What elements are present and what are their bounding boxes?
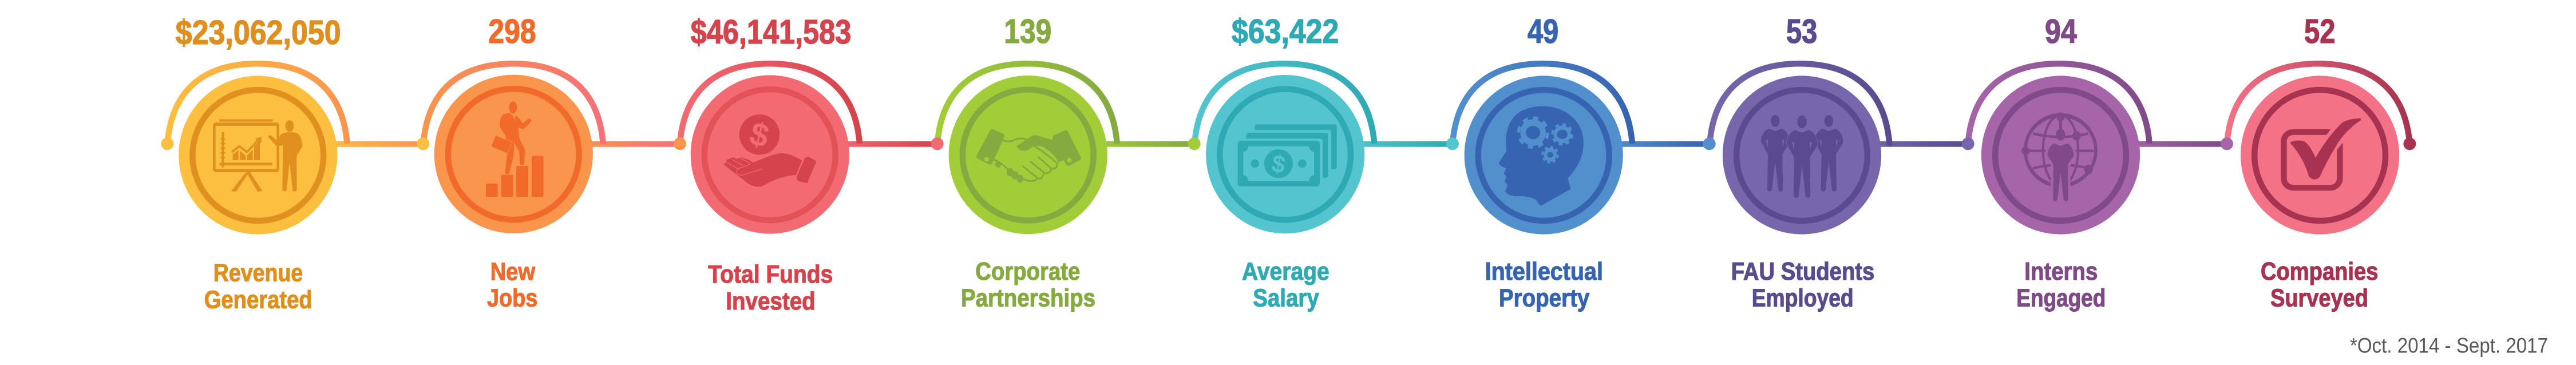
connector line <box>2118 141 2227 147</box>
start dot <box>1446 137 1459 150</box>
medallion <box>1981 76 2140 235</box>
start dot <box>2221 137 2233 150</box>
connector line <box>1345 141 1453 147</box>
start dot <box>161 137 174 150</box>
medallion <box>1723 76 1881 235</box>
panel: Corporate Partnerships <box>931 12 1194 312</box>
icon: presenter at chart board <box>214 120 303 192</box>
label: Intellectual <box>1485 257 1603 285</box>
arc <box>1968 64 2150 144</box>
arc <box>680 64 860 144</box>
value: 139 <box>1004 12 1051 50</box>
panel: Interns Engaged <box>1962 12 2227 312</box>
medallion <box>434 75 593 233</box>
value: 298 <box>488 12 536 50</box>
value: 53 <box>1786 12 1817 50</box>
label <box>487 257 537 312</box>
panel: Total Funds Invested <box>674 13 937 315</box>
label: Engaged <box>2016 284 2106 312</box>
value: $46,141,583 <box>691 13 851 51</box>
icon: hand holding coin: $ <box>746 115 773 155</box>
icon: head with gears <box>1499 106 1584 205</box>
label: FAU Students <box>1731 257 1874 285</box>
label <box>1242 257 1329 312</box>
panel: New Jobs <box>417 12 680 312</box>
start dot <box>1703 137 1716 150</box>
value: 94 <box>2045 12 2077 50</box>
value: 52 <box>2304 12 2335 50</box>
label: Employed <box>1752 284 1854 312</box>
value: $63,422 <box>1232 12 1339 50</box>
start dot <box>417 137 429 150</box>
arc <box>1710 64 1889 144</box>
icon: stack of banknotes <box>1238 124 1337 187</box>
label: Average <box>1242 257 1329 285</box>
medallion <box>2241 76 2399 235</box>
label: Interns <box>2024 257 2098 285</box>
start dot <box>674 137 686 150</box>
label: Jobs <box>487 284 537 312</box>
label <box>961 257 1095 312</box>
label <box>2261 257 2378 312</box>
icon: person in front of globe <box>2021 112 2096 201</box>
arc <box>167 64 347 144</box>
label: Corporate <box>975 257 1080 285</box>
connector line <box>830 141 937 147</box>
label <box>204 259 312 314</box>
icon: stack of banknotes: $ <box>1269 149 1287 178</box>
start dot <box>1188 137 1201 150</box>
label: Revenue <box>213 259 303 287</box>
start dot <box>931 137 944 150</box>
icon: three businessmen <box>1761 115 1843 198</box>
value: 49 <box>1528 12 1558 50</box>
label <box>1485 257 1603 312</box>
label: Property <box>1499 284 1590 312</box>
arc <box>424 64 603 144</box>
label: Generated <box>204 285 312 314</box>
medallion <box>1206 75 1364 233</box>
footnote: *Oct. 2014 - Sept. 2017 <box>2350 334 2548 358</box>
value: $23,062,050 <box>176 13 341 51</box>
icon: handshake <box>976 129 1081 182</box>
medallion <box>1465 76 1623 235</box>
icon: checked box <box>2284 118 2361 188</box>
label <box>708 260 833 315</box>
medallion <box>949 76 1107 234</box>
connector line <box>1087 141 1194 147</box>
label: New <box>490 257 536 285</box>
label: Salary <box>1253 284 1319 312</box>
connector line <box>1602 141 1710 147</box>
panel: Intellectual Property <box>1446 12 1710 312</box>
arc <box>1194 64 1374 144</box>
end dot <box>2403 137 2416 150</box>
arc <box>2227 64 2409 144</box>
label: Surveyed <box>2270 284 2368 312</box>
start dot <box>1962 137 1974 150</box>
arc <box>1453 64 1632 144</box>
panel: Revenue Generated <box>161 13 423 314</box>
panel: FAU Students Employed <box>1703 12 1968 312</box>
label <box>2016 257 2106 312</box>
arc <box>937 64 1117 144</box>
panel: Companies Surveyed <box>2221 12 2416 312</box>
medallion <box>179 76 337 235</box>
connector line <box>320 141 423 147</box>
connector line <box>1860 141 1968 147</box>
icon: hand holding coin <box>723 114 816 187</box>
icon: businessman climbing bars <box>486 101 544 197</box>
label: Invested <box>726 287 816 315</box>
panel: Average Salary <box>1188 12 1453 312</box>
label: Total Funds <box>708 260 833 288</box>
label: Companies <box>2261 257 2378 285</box>
medallion <box>691 75 849 234</box>
label: Partnerships <box>961 284 1095 312</box>
connector line <box>575 141 680 147</box>
label <box>1731 257 1874 312</box>
